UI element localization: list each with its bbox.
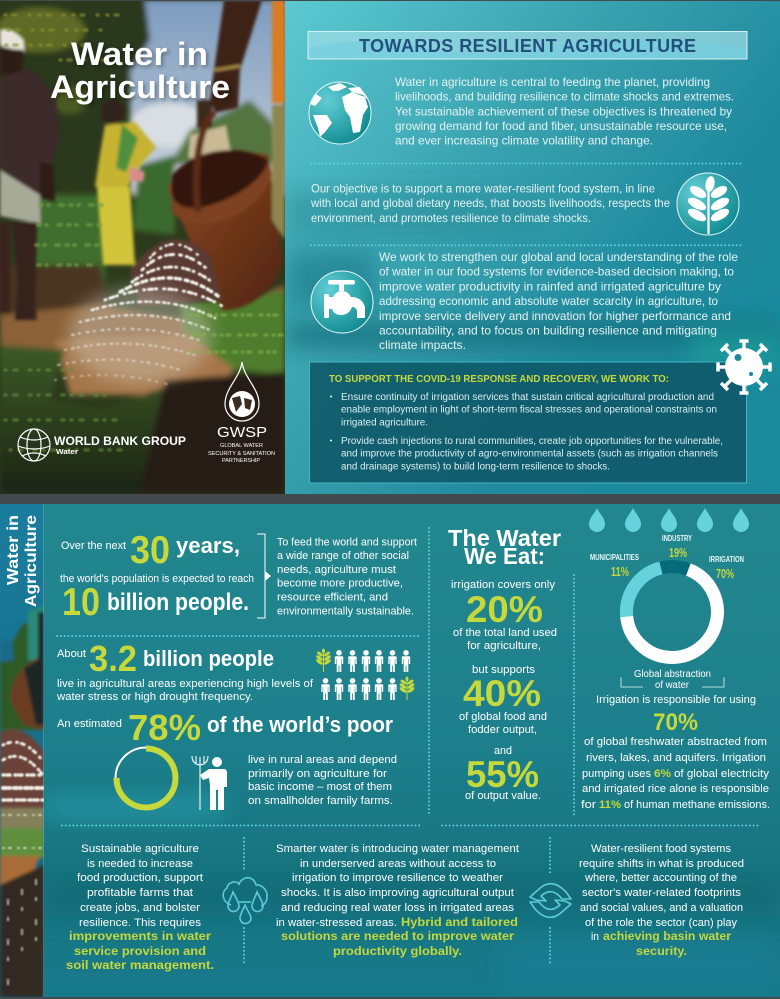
text: intro paragraph — [395, 75, 734, 148]
text: smarter water: Hybrid and tailored — [401, 915, 518, 929]
stat: 55% of value: 55% — [466, 754, 539, 795]
text: work paragraph: We work to strengthen our global and local understanding of the role — [379, 250, 738, 264]
text: water-resilient food systems: and social values, and a valuation — [580, 902, 743, 914]
text: smarter water — [276, 843, 519, 958]
chart labels: IRRIGATION — [709, 555, 744, 564]
stat: 78% of the world's poor: An estimated — [57, 718, 122, 730]
water spray — [55, 244, 222, 385]
icon: rain cloud — [223, 878, 267, 924]
stat: 20% of land: of the total land used — [453, 627, 557, 639]
chart labels: 70% — [716, 566, 734, 581]
panel: towards resilient agriculture — [285, 1, 780, 494]
text: intro paragraph: Yet sustainable achievement of these objectives is threatened by — [395, 104, 732, 118]
chart labels: Global abstraction — [634, 669, 711, 680]
text: water-resilient food systems — [579, 843, 744, 958]
icon: cycle arrows — [530, 884, 571, 917]
stat: 20% of land — [451, 579, 557, 652]
text: intro paragraph: livelihoods, and building resilience to climate shocks and extremes. — [395, 90, 734, 104]
text: sustainable agriculture — [66, 843, 214, 972]
vertical title: Agriculture — [23, 515, 40, 607]
stat: 30 years 10 billion: the world's population is expected to reach — [60, 573, 254, 585]
text: water-resilient food systems: in — [591, 931, 599, 943]
stat: irrigation 70%: pumping uses — [582, 768, 651, 780]
text: sustainable agriculture: resilience. This requires — [79, 917, 202, 929]
text: work paragraph: addressing economic and absolute water scarcity in agriculture, to — [379, 294, 718, 308]
vertical title: Water in — [5, 515, 22, 585]
text: objective paragraph — [310, 182, 670, 225]
text: work paragraph: improve water productivity in rainfed and irrigated agriculture by — [379, 279, 721, 293]
text: rural areas: basic income – most of them — [248, 781, 392, 793]
panel: COVID-19 response — [310, 362, 746, 483]
stat: irrigation 70%: and irrigated rice alone is responsible — [582, 783, 769, 795]
panel: photo cover — [0, 0, 285, 494]
text: water-resilient food systems: require shifts in what is produced — [579, 858, 744, 870]
stat: 3.2 billion people: live in agricultural areas experiencing high levels of — [57, 678, 314, 690]
icon: tap — [311, 271, 373, 333]
text: water-resilient food systems: where, better accounting of the — [584, 872, 737, 884]
stat: irrigation 70%: rivers, lakes, and aquifers. Irrigation — [586, 752, 766, 764]
icon: people and wheat pictogram — [315, 648, 415, 700]
arrow: bracket — [257, 534, 271, 618]
text: water-resilient food systems: security. — [636, 944, 687, 958]
stat: irrigation 70%: 11% — [599, 799, 621, 811]
text: work paragraph: climate impacts. — [379, 338, 466, 352]
stat: irrigation 70% — [581, 694, 770, 811]
icon: wheat — [677, 173, 739, 235]
stat: irrigation 70%: Irrigation is responsible for using — [596, 694, 756, 706]
stat: 3.2 billion people: About — [57, 648, 86, 660]
text: work paragraph — [379, 250, 738, 352]
stat: 20% of land: irrigation covers only — [451, 579, 556, 591]
text: objective paragraph: Our objective is to support a more water-resilient food system, in line — [311, 182, 655, 196]
text: feed the world: needs, agriculture must — [277, 564, 396, 576]
text: intro paragraph: and ever increasing climate volatility and change. — [395, 134, 653, 148]
text: rural areas — [248, 754, 397, 807]
text: sustainable agriculture: soil water management. — [66, 958, 214, 972]
text: sustainable agriculture: improvements in water — [69, 929, 211, 943]
stat: 30 years 10 billion: years, — [176, 533, 240, 558]
stat: 40% of output: fodder output, — [468, 724, 537, 736]
icon: water drops — [589, 508, 749, 532]
text: smarter water: irrigation to improve resilience to weather — [292, 872, 503, 884]
chart labels: INDUSTRY — [662, 534, 692, 543]
stat: 30 years 10 billion — [60, 529, 254, 624]
text: feed the world: environmentally sustainable. — [277, 606, 414, 618]
heading box: TOWARDS RESILIENT AGRICULTURE — [359, 36, 696, 56]
text: feed the world: become more productive, — [277, 578, 403, 590]
logo: GWSP: GLOBAL WATER — [220, 443, 263, 449]
stat: 40% of output: of global food and — [459, 711, 547, 723]
text: intro paragraph: Water in agriculture is central to feeding the planet, providing — [395, 75, 710, 89]
text: objective paragraph: with local and global dietary needs, that boosts livelihoods, respects the — [310, 196, 670, 210]
stat: 3.2 billion people — [56, 638, 314, 703]
title: Water in Agriculture — [50, 36, 230, 105]
logo: World Bank Group — [18, 429, 186, 461]
stat: irrigation 70%: of global freshwater abstracted from — [584, 736, 767, 748]
stat: 40% of output: but supports — [472, 664, 536, 676]
panel: COVID-19 response: and drainage systems) to build long-term resilience to shocks. — [341, 462, 610, 473]
panel: COVID-19 response: enable employment in light of short-term fiscal stresses and operational constraints on — [341, 405, 717, 416]
stat: 3.2 billion people: water stress or high drought frequency. — [56, 691, 253, 703]
chart labels: MUNICIPALITIES — [590, 553, 640, 562]
stat: 78% of the world's poor: 78% — [128, 707, 201, 748]
stat: 30 years 10 billion: Over the next — [61, 540, 126, 552]
stat: 40% of output: 40% — [463, 673, 541, 714]
stat: 30 years 10 billion: billion people. — [107, 589, 249, 616]
text: smarter water: shocks. It is also improving agricultural output — [281, 887, 514, 899]
text: intro paragraph: growing demand for food and fiber, unsustainable resource use, — [395, 119, 727, 133]
text: rural areas: primarily on agriculture for — [248, 768, 387, 780]
stat: 3.2 billion people: billion people — [143, 646, 274, 671]
logo: GWSP: SECURITY & SANITATION — [208, 451, 275, 457]
chart: 78% donut — [116, 748, 176, 808]
foliage flecks — [5, 15, 282, 450]
text: smarter water: and reducing real water loss in irrigated areas — [281, 902, 515, 914]
heading: The Water We Eat: We Eat: — [464, 543, 545, 569]
stat: 55% of value: and — [494, 745, 512, 757]
panel: COVID-19 response: irrigated agriculture. — [341, 417, 428, 428]
logo: World Bank Group: Water — [56, 447, 78, 456]
vertical title — [5, 515, 40, 607]
text: water-resilient food systems: of the role the sector (can) play — [585, 917, 737, 929]
chart: global abstraction donut — [626, 567, 717, 657]
panel: COVID-19 response: Provide cash injections to rural communities, create job opportunities for the vulnerable, — [341, 436, 723, 447]
icon: globe — [309, 82, 371, 144]
stat: 40% of output — [459, 664, 547, 736]
panel: COVID-19 response: Ensure continuity of irrigation services that sustain critical agricultural production and — [341, 392, 714, 403]
panel: statistics — [0, 504, 780, 997]
text: water-resilient food systems: achieving basin water — [603, 929, 731, 943]
text: rural areas: on smallholder family farms. — [248, 795, 393, 807]
text: sustainable agriculture: is needed to increase — [87, 858, 193, 870]
photo strip — [0, 504, 44, 997]
logo: GWSP — [208, 362, 275, 464]
text: work paragraph: accountability, and to focus on building resilience and mitigating — [379, 324, 717, 338]
text: smarter water: in water-stressed areas. — [276, 917, 397, 929]
text: smarter water: Smarter water is introducing water management — [276, 843, 519, 855]
stat: 3.2 billion people: 3.2 — [89, 638, 137, 679]
logo: GWSP: PARTNERSHIP — [222, 458, 260, 464]
text: sustainable agriculture: Sustainable agriculture — [81, 843, 199, 855]
stat: irrigation 70%: 6% — [654, 768, 671, 780]
stat: irrigation 70%: of global electricity — [674, 768, 770, 780]
logo: World Bank Group: WORLD BANK GROUP — [54, 434, 186, 448]
text: feed the world: resource efficient, and — [277, 592, 388, 604]
text: objective paragraph: environment, and promotes resilience to climate shocks. — [311, 211, 591, 225]
logo: GWSP: GWSP — [217, 424, 267, 441]
stat: irrigation 70%: for — [581, 799, 596, 811]
text: water-resilient food systems: sector's water-related footprints — [582, 887, 742, 899]
text: smarter water: in underserved areas without access to — [300, 858, 496, 870]
heading box — [308, 32, 747, 59]
chart labels — [590, 534, 744, 691]
stat: 30 years 10 billion: 30 — [130, 529, 170, 572]
chart labels: 19% — [669, 545, 687, 560]
text: feed the world — [277, 537, 417, 618]
title: Water in Agriculture: Agriculture — [50, 69, 230, 105]
text: work paragraph: improve service delivery and innovation for higher performance and — [379, 309, 731, 323]
stat: irrigation 70%: of human methane emissions. — [624, 799, 770, 811]
stat: 20% of land: for agriculture, — [467, 640, 541, 652]
heading: The Water We Eat: The Water — [448, 525, 561, 551]
stat: 30 years 10 billion: 10 — [62, 581, 100, 624]
stat: 78% of the world's poor: of the world’s poor — [207, 712, 393, 737]
text: feed the world: a wide range of other social — [277, 550, 409, 562]
panel: COVID-19 response: and improve the productivity of agro-environmental assets (such as irrigation channels — [341, 449, 718, 460]
panel: COVID-19 response: TO SUPPORT THE COVID-19 RESPONSE AND RECOVERY, WE WORK TO: — [329, 373, 669, 385]
stat: 55% of value: of output value. — [465, 790, 541, 802]
text: sustainable agriculture: profitable farms that — [87, 887, 193, 899]
text: work paragraph: of water in our food systems for evidence-based decision making, to — [379, 265, 734, 279]
stat: 20% of land: 20% — [466, 589, 543, 630]
stat: irrigation 70%: 70% — [653, 709, 698, 736]
text: smarter water: productivity globally. — [333, 944, 462, 958]
text: smarter water: solutions are needed to improve water — [281, 929, 514, 943]
text: feed the world: To feed the world and support — [277, 537, 417, 549]
chart labels: 11% — [611, 564, 629, 579]
stat: 78% of the world's poor — [57, 707, 393, 748]
text: water-resilient food systems: Water-resilient food systems — [591, 843, 732, 855]
chart labels: of water — [655, 680, 690, 691]
title: Water in Agriculture: Water in — [71, 36, 208, 72]
heading: The Water We Eat — [448, 525, 561, 569]
icon: farmer with pitchfork — [192, 756, 227, 810]
text: sustainable agriculture: food production, support — [77, 872, 203, 884]
text: rural areas: live in rural areas and depend — [248, 754, 397, 766]
icon: virus — [718, 341, 770, 393]
text: sustainable agriculture: service provision and — [74, 944, 206, 958]
text: sustainable agriculture: create jobs, and bolster — [80, 902, 200, 914]
